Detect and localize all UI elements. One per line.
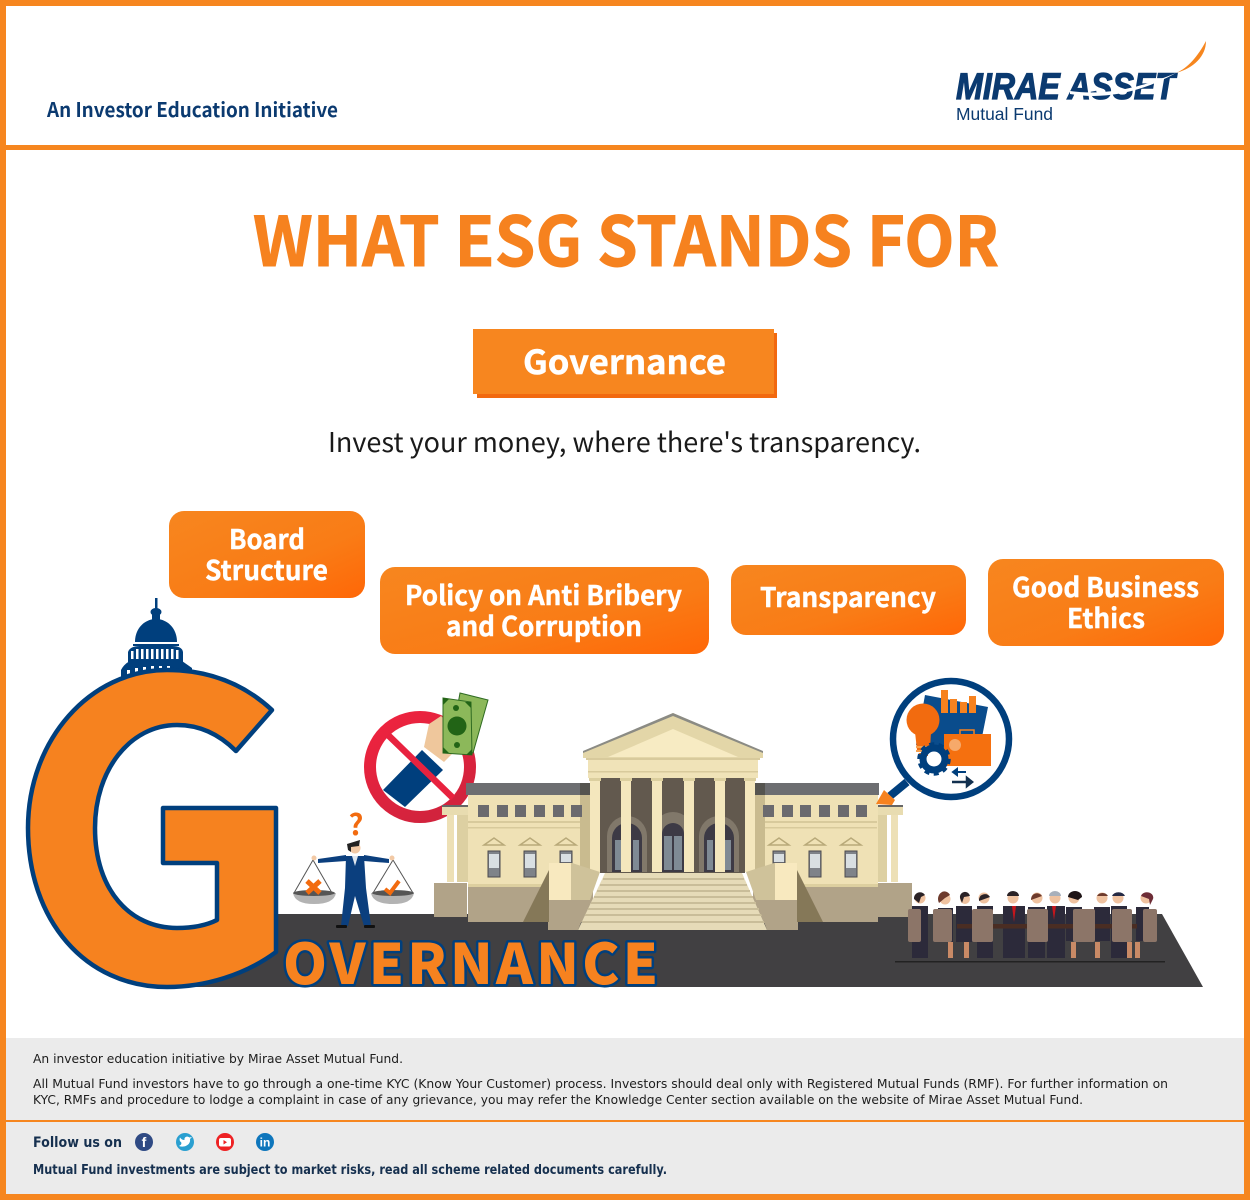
table	[957, 924, 1137, 928]
icon: no bribery sign	[370, 693, 488, 817]
footer disclaimer: An investor education initiative by Mirae Asset Mutual Fund.	[33, 1051, 403, 1066]
side pavilions	[434, 805, 912, 917]
heading button: Governance: Governance	[523, 336, 726, 384]
footer divider	[6, 1120, 1244, 1122]
icon: youtube	[216, 1133, 234, 1151]
logo: Mirae Asset Mutual Fund	[956, 41, 1206, 124]
header divider	[6, 145, 1244, 150]
tag: Board Structure: Board	[229, 518, 305, 557]
icon: magnifier with business symbols	[876, 681, 1009, 805]
tag: Good Business Ethics: Good Business	[1012, 566, 1199, 605]
social icons	[135, 1133, 274, 1151]
tag: Transparency: Transparency	[760, 576, 936, 615]
tag: Policy on Anti Bribery and Corruption	[380, 567, 709, 654]
icon: man weighing scales	[293, 802, 414, 928]
illustration: boardroom meeting	[895, 891, 1165, 962]
tag: Good Business Ethics: Ethics	[1067, 597, 1145, 636]
word OVERNANCE: OVERNANCE	[283, 920, 658, 1001]
icon: man weighing scales: ?	[349, 802, 363, 844]
risk disclaimer: Mutual Fund investments are subject to market risks, read all scheme related documents carefully.	[33, 1163, 667, 1178]
logo: Mirae Asset Mutual Fund: Mutual Fund	[956, 104, 1053, 124]
tag: Good Business Ethics	[988, 559, 1224, 646]
tag: Transparency	[731, 565, 966, 635]
heading button: Governance	[473, 329, 777, 398]
panel: footer background	[6, 1038, 1244, 1194]
footer disclaimer	[33, 1051, 1168, 1107]
upper windows	[478, 805, 867, 817]
title: WHAT ESG STANDS FOR	[253, 187, 999, 286]
chairs	[908, 909, 1157, 942]
follow us label: Follow us on	[33, 1135, 122, 1151]
icon: twitter	[176, 1133, 194, 1151]
header tagline: An Investor Education Initiative	[46, 94, 338, 123]
lower windows	[484, 838, 861, 877]
icon: capitol dome	[121, 598, 192, 682]
stairs	[523, 863, 823, 930]
board members	[912, 891, 1153, 958]
big letter G	[28, 670, 276, 987]
tag: Board Structure: Structure	[205, 549, 328, 588]
tag: Policy on Anti Bribery and Corruption: Policy on Anti Bribery	[405, 574, 682, 613]
footer disclaimer: KYC, RMFs and procedure to lodge a complaint in case of any grievance, you may refer the Knowledge Center section available on the website of Mirae Asset Mutual Fund.	[33, 1092, 1083, 1107]
header band	[46, 41, 1206, 124]
portico	[583, 713, 763, 873]
logo: Mirae Asset Mutual Fund: MIRAE ASSET	[956, 66, 1178, 107]
ground platform	[190, 914, 1203, 987]
building: courthouse	[434, 713, 912, 930]
tag: Policy on Anti Bribery and Corruption: and Corruption	[446, 605, 642, 644]
footer disclaimer: All Mutual Fund investors have to go through a one-time KYC (Know Your Customer) process. Investors should deal only with Registered Mutual Funds (RMF). For further information on	[33, 1076, 1168, 1091]
tag: Board Structure	[169, 511, 365, 598]
wings	[466, 783, 879, 922]
subtitle: Invest your money, where there's transparency.	[328, 421, 921, 460]
icon: facebook: f	[142, 1134, 147, 1150]
icon: linkedin: in	[260, 1136, 270, 1150]
